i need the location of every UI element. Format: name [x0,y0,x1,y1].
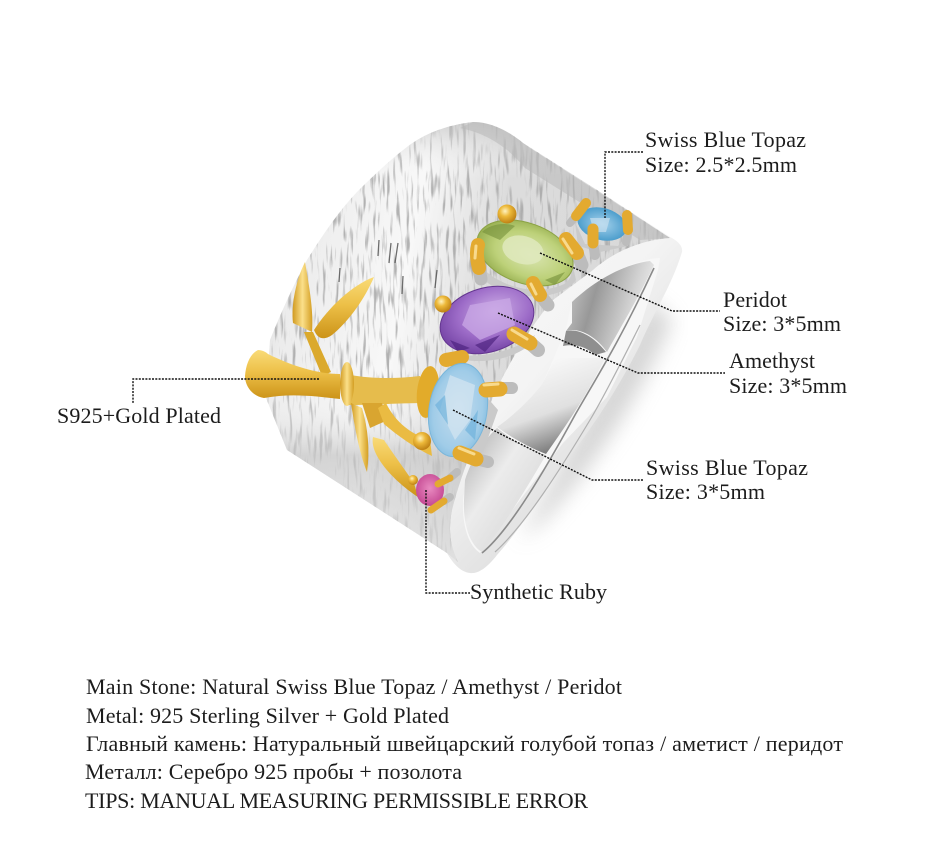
upper leaf left [293,262,312,332]
leader: topaz [453,410,643,480]
branch joint [362,403,388,428]
specification text block: Металл: Серебро 925 пробы + позолота [85,759,462,784]
label: metal: S925+Gold Plated [57,403,221,428]
label: top swiss blue topaz: Size: 2.5*2.5mm [645,152,797,177]
gold bamboo [245,262,442,497]
peridot dark facets [482,224,565,285]
leader: peridot [540,253,720,311]
hammered silver face [260,115,680,575]
label: peridot: Size: 3*5mm [723,311,841,336]
amethyst stone [432,275,542,365]
leader: ruby [426,490,470,593]
label: synthetic ruby: Synthetic Ruby [470,579,607,604]
leader: top topaz [605,152,643,218]
lower leaf [351,403,368,472]
small topaz facets [590,218,610,232]
thin far rim second line [495,325,640,552]
ring cast shadow [520,300,672,540]
lower branch [378,403,432,456]
peridot stone [468,208,582,298]
prong tails silver [444,217,628,501]
label: peridot [723,287,841,336]
small topaz stone [574,202,630,246]
topaz top prong [446,357,462,360]
leader: metal [133,379,319,404]
upper shaded band surface [566,261,654,352]
lower inner surface [464,428,546,552]
specification text block: TIPS: MANUAL MEASURING PERMISSIBLE ERROR [85,788,588,813]
amethyst [432,275,542,365]
topaz side bead [413,432,431,450]
stem left segment [245,350,340,399]
label: lower swiss blue topaz [646,455,808,504]
specification text block: Main Stone: Natural Swiss Blue Topaz / Amethyst / Peridot [86,674,622,699]
swiss blue topaz [413,357,500,461]
lower inner shadow [497,358,605,454]
dark crease of band [563,330,606,355]
label: peridot: Peridot [723,287,787,312]
topaz prongs [459,384,500,459]
leader lines [133,152,725,593]
ring illustration [245,115,682,575]
leader: amethyst [498,313,725,373]
ruby bead [408,475,418,485]
specification text block: Metal: 925 Sterling Silver + Gold Plated [86,703,449,728]
silver collets [445,222,630,456]
stem right segment [345,374,428,405]
ring rim body [266,122,682,573]
label: lower swiss blue topaz: Swiss Blue Topaz [646,455,808,480]
stem node [340,362,354,406]
topaz stone [422,359,494,461]
topaz facets [440,375,475,440]
ruby stone [416,474,444,506]
peridot highlight [499,231,547,269]
label: lower swiss blue topaz: Size: 3*5mm [646,479,765,504]
upper leaf right [314,277,374,338]
label: amethyst: Amethyst [729,348,815,373]
label: amethyst [729,348,847,398]
specification text block: Главный камень: Натуральный швейцарский голубой топаз / аметист / перидот [86,731,843,756]
amethyst prong [512,330,530,343]
label: top swiss blue topaz: Swiss Blue Topaz [645,127,806,152]
top blue topaz [574,202,630,246]
synthetic ruby [408,474,450,510]
peridot top bead [498,204,516,224]
stem right flare [414,365,442,419]
thin far rim highlight [482,268,654,553]
lower leaf with ruby [373,437,418,497]
peridot prongs [475,239,577,295]
label: amethyst: Size: 3*5mm [729,373,847,398]
label: top swiss blue topaz [645,127,806,177]
inner band base [463,258,660,553]
amethyst facets [462,298,515,340]
ruby prongs [431,478,450,510]
gemstones and settings [408,202,630,510]
amethyst bead [434,296,452,312]
leaf twig [304,332,331,376]
small topaz prongs [576,203,628,243]
inner band of ring [463,258,660,553]
peridot [468,208,582,298]
specification text block [85,674,843,813]
